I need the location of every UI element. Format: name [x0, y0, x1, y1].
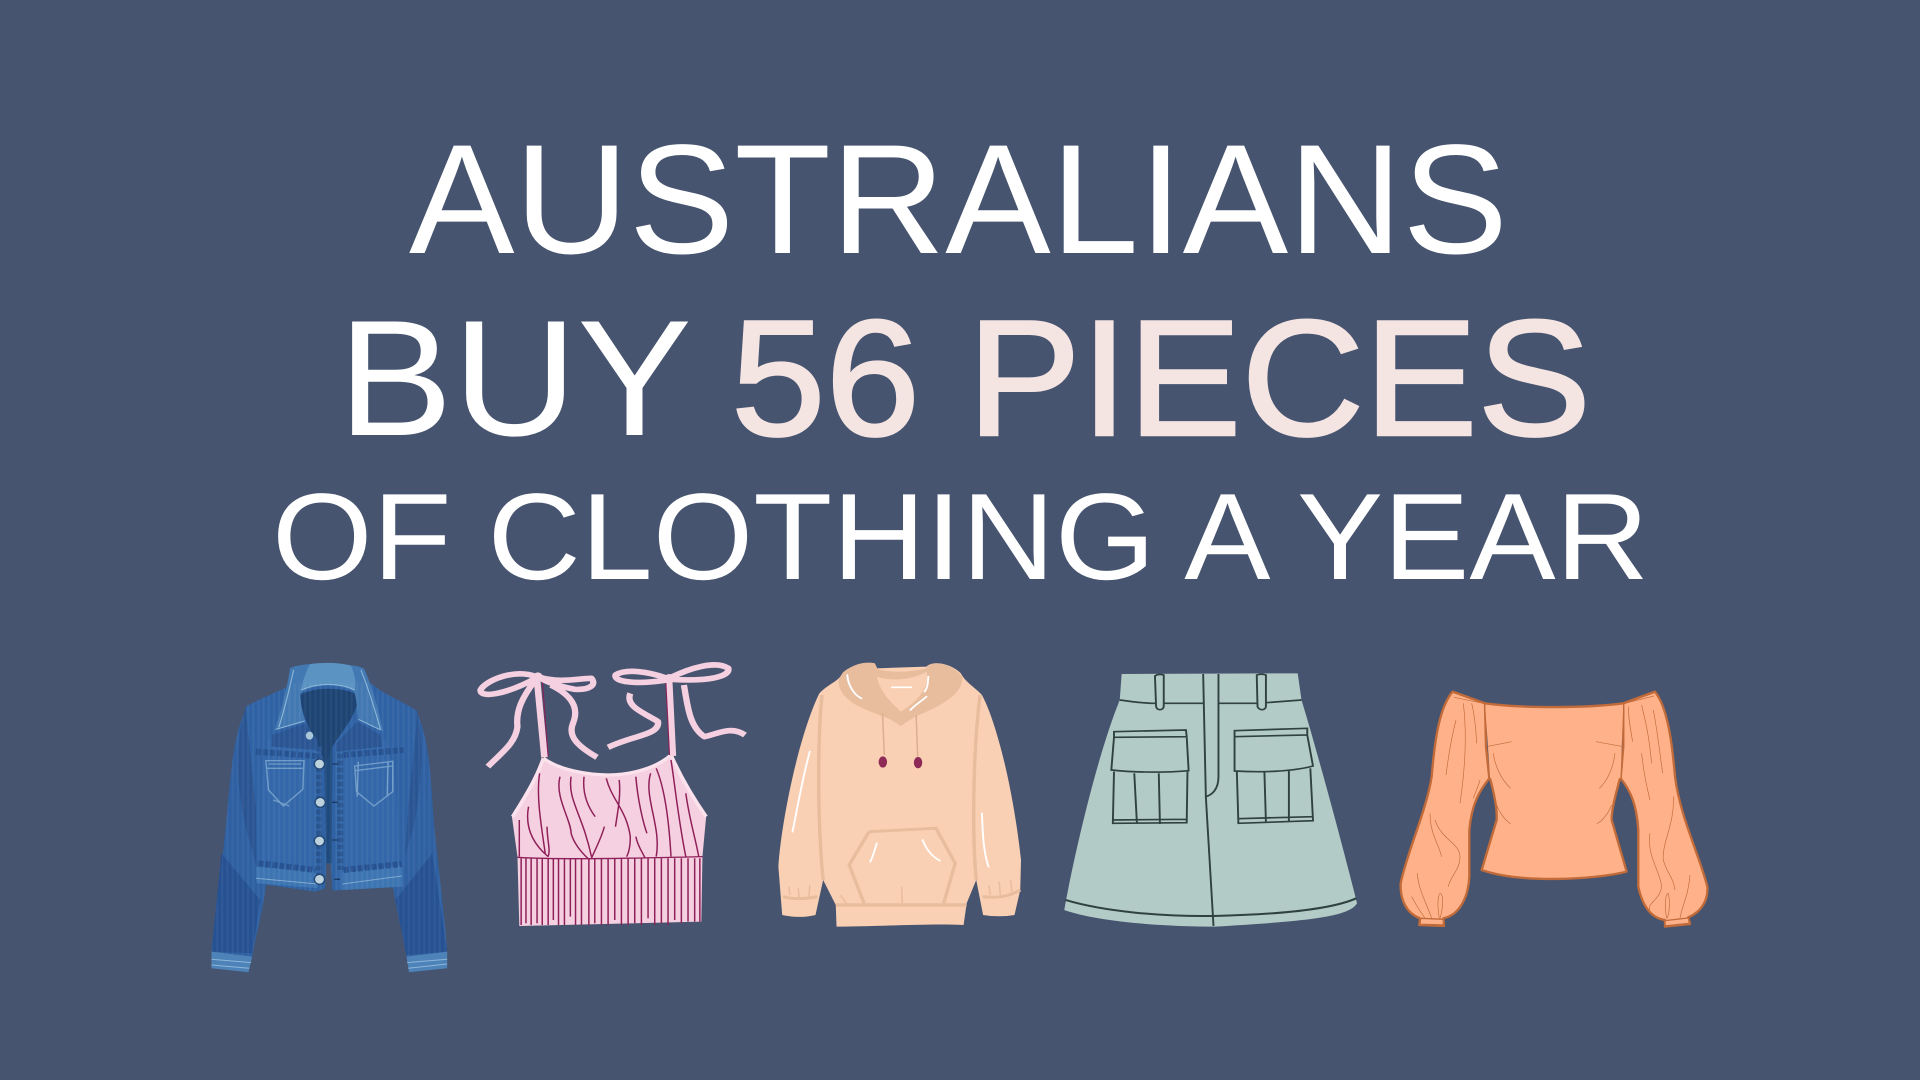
title — [272, 113, 1649, 606]
title line 2: highlighted figure: 56 PIECES — [731, 286, 1591, 470]
icon: orange off-shoulder blouse — [1401, 692, 1707, 927]
icon: pink tie-strap crop top — [480, 665, 745, 926]
infographic canvas — [211, 144, 1709, 972]
title line 1: AUSTRALIANS — [409, 113, 1508, 287]
icon: peach hoodie — [778, 663, 1021, 927]
icon: sage green skirt — [1064, 673, 1357, 927]
icon: denim jacket — [211, 663, 449, 973]
title line 2: buy: BUY — [338, 286, 692, 470]
title line 3: OF CLOTHING A YEAR — [272, 469, 1649, 606]
